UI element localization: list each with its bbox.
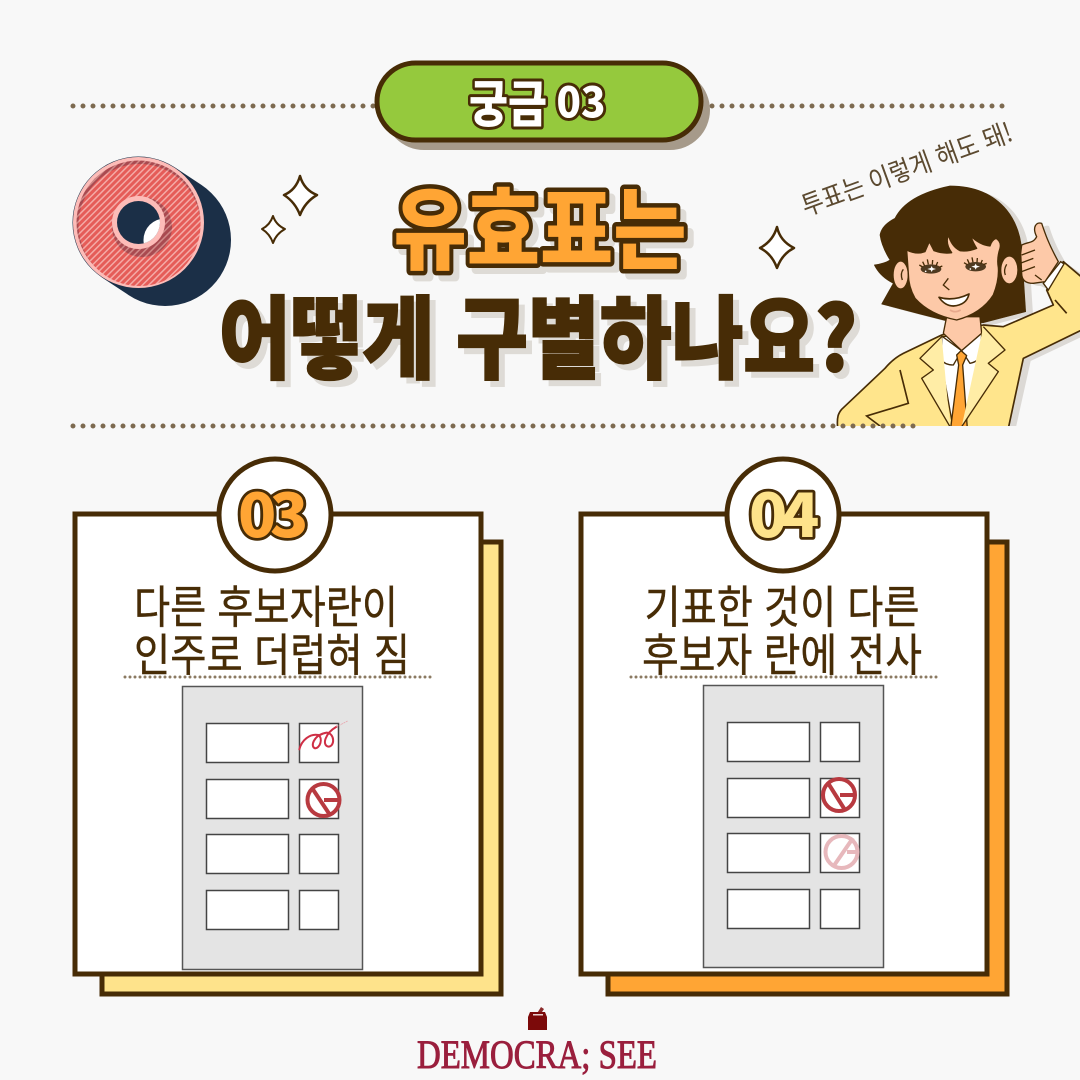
- illustration: woman in yellow suit giving thumbs up: [837, 186, 1080, 429]
- handwritten note: 투표는 이렇게 해도 돼!: [795, 111, 1017, 223]
- dotted rule: top left: [73, 104, 375, 108]
- stamp mark: [823, 779, 855, 811]
- tie: [951, 351, 967, 428]
- ballot paper: smudged: [182, 686, 362, 970]
- ballot paper: transferred stamp: [704, 686, 884, 968]
- card text: 인주로 더럽혀 짐: [134, 619, 410, 684]
- title line 2: 어떻게 구별하나요?: [225, 273, 863, 403]
- card text: 후보자 란에 전사: [642, 619, 922, 684]
- drop shadow: [889, 193, 1080, 426]
- stamp mark: [308, 784, 340, 816]
- faint transferred stamp: [826, 836, 858, 868]
- card text: [134, 571, 410, 684]
- jacket: [837, 262, 1080, 428]
- number badge 03: [219, 459, 331, 571]
- dotted rule: below header: [73, 424, 916, 428]
- nose: [943, 278, 949, 290]
- icon: right sparkle: [760, 227, 794, 268]
- icon: small sparkle: [262, 216, 285, 243]
- badge label: 궁금: [469, 65, 547, 137]
- badge: 궁금 03: [377, 63, 710, 150]
- title line 1: 유효표는: [394, 158, 686, 288]
- eyes: [919, 257, 987, 274]
- card text: 기표한 것이 다른: [644, 571, 920, 636]
- card text: [642, 571, 922, 684]
- icon: large sparkle: [284, 176, 317, 215]
- shirt: [942, 336, 976, 420]
- panel: card 04: [581, 459, 1007, 994]
- cuff: [1043, 262, 1064, 290]
- badge label: 03: [556, 70, 606, 130]
- title line 2: 어떻게 구별하나요?: [219, 267, 857, 397]
- neck: [943, 317, 982, 351]
- title line 1: 유효표는: [400, 164, 692, 294]
- badge label: [469, 65, 606, 137]
- dotted rule: top right: [712, 104, 1006, 108]
- face: [907, 235, 1000, 320]
- collar: [942, 333, 982, 365]
- hair back: [874, 186, 1026, 323]
- number badge 04: [727, 459, 839, 571]
- logo: ballot box icon: [528, 1007, 547, 1030]
- ears: [893, 256, 1018, 289]
- icon: striped ring: [73, 157, 204, 288]
- number badge 04: 04: [749, 468, 818, 555]
- ink smudge squiggle: [299, 721, 348, 749]
- number badge 03: 03: [238, 468, 306, 555]
- hand: [1021, 223, 1058, 283]
- head: [893, 235, 1018, 320]
- panel: card 03: [75, 459, 501, 994]
- card text: 다른 후보자란이: [134, 571, 398, 636]
- logo wordmark: DEMOCRA; SEE: [417, 1032, 657, 1077]
- mouth: [939, 294, 969, 306]
- lapels: [920, 327, 1005, 427]
